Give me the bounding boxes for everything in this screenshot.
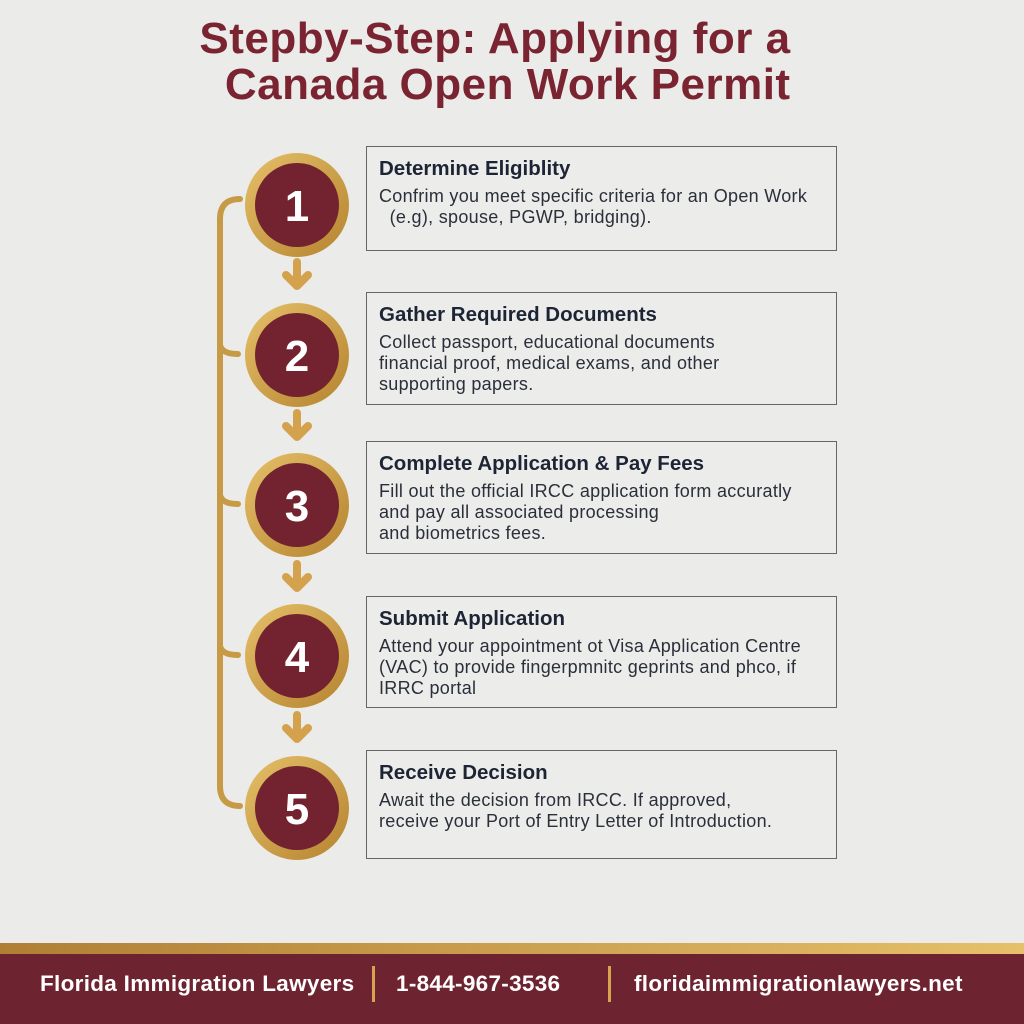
step 4 box: Attend your appointment ot Visa Application Centre [379, 636, 801, 656]
step 3 box [366, 441, 837, 554]
step 1 box: Confrim you meet specific criteria for an Open Work [379, 186, 807, 206]
step 4 box: (VAC) to provide fingerpmnitc geprints and phco, if [379, 657, 796, 677]
step 5 box [366, 750, 837, 859]
title: Canada Open Work Permit [225, 60, 791, 109]
step 3 box: Complete Application & Pay Fees [379, 452, 704, 475]
title: Stepby-Step: Applying for a [199, 14, 791, 63]
step 1 box: (e.g), spouse, PGWP, bridging). [390, 207, 652, 227]
step circles [245, 153, 349, 860]
step 4 box: Submit Application [379, 607, 565, 630]
footer [0, 954, 1024, 1024]
step 5 box: receive your Port of Entry Letter of Introduction. [379, 811, 772, 831]
footer: Florida Immigration Lawyers [40, 971, 354, 996]
step 3 box: Fill out the official IRCC application form accuratly [379, 481, 792, 501]
footer: floridaimmigrationlawyers.net [634, 971, 963, 996]
step 5 box: Await the decision from IRCC. If approved, [379, 790, 731, 810]
step 1 box [366, 146, 837, 251]
step 2 box [366, 292, 837, 405]
footer: 1-844-967-3536 [396, 971, 560, 996]
step circles: 3 [285, 482, 309, 531]
timeline graphic [217, 153, 349, 860]
step circles: 4 [285, 633, 310, 682]
bracket line [220, 199, 240, 806]
title [199, 14, 791, 109]
step 3 box: and biometrics fees. [379, 523, 546, 543]
arrows [286, 262, 308, 739]
step 4 box [366, 596, 837, 708]
gold band [0, 943, 1024, 954]
step 2 box: financial proof, medical exams, and other [379, 353, 719, 373]
step 4 box: IRRC portal [379, 678, 476, 698]
step 1 box: Determine Eligiblity [379, 157, 570, 180]
step circles: 1 [285, 182, 309, 231]
step 3 box: and pay all associated processing [379, 502, 659, 522]
step circles: 2 [285, 332, 309, 381]
step circles: 5 [285, 785, 309, 834]
step 2 box: Collect passport, educational documents [379, 332, 715, 352]
step 2 box: Gather Required Documents [379, 303, 657, 326]
step 2 box: supporting papers. [379, 374, 534, 394]
step 5 box: Receive Decision [379, 761, 548, 784]
